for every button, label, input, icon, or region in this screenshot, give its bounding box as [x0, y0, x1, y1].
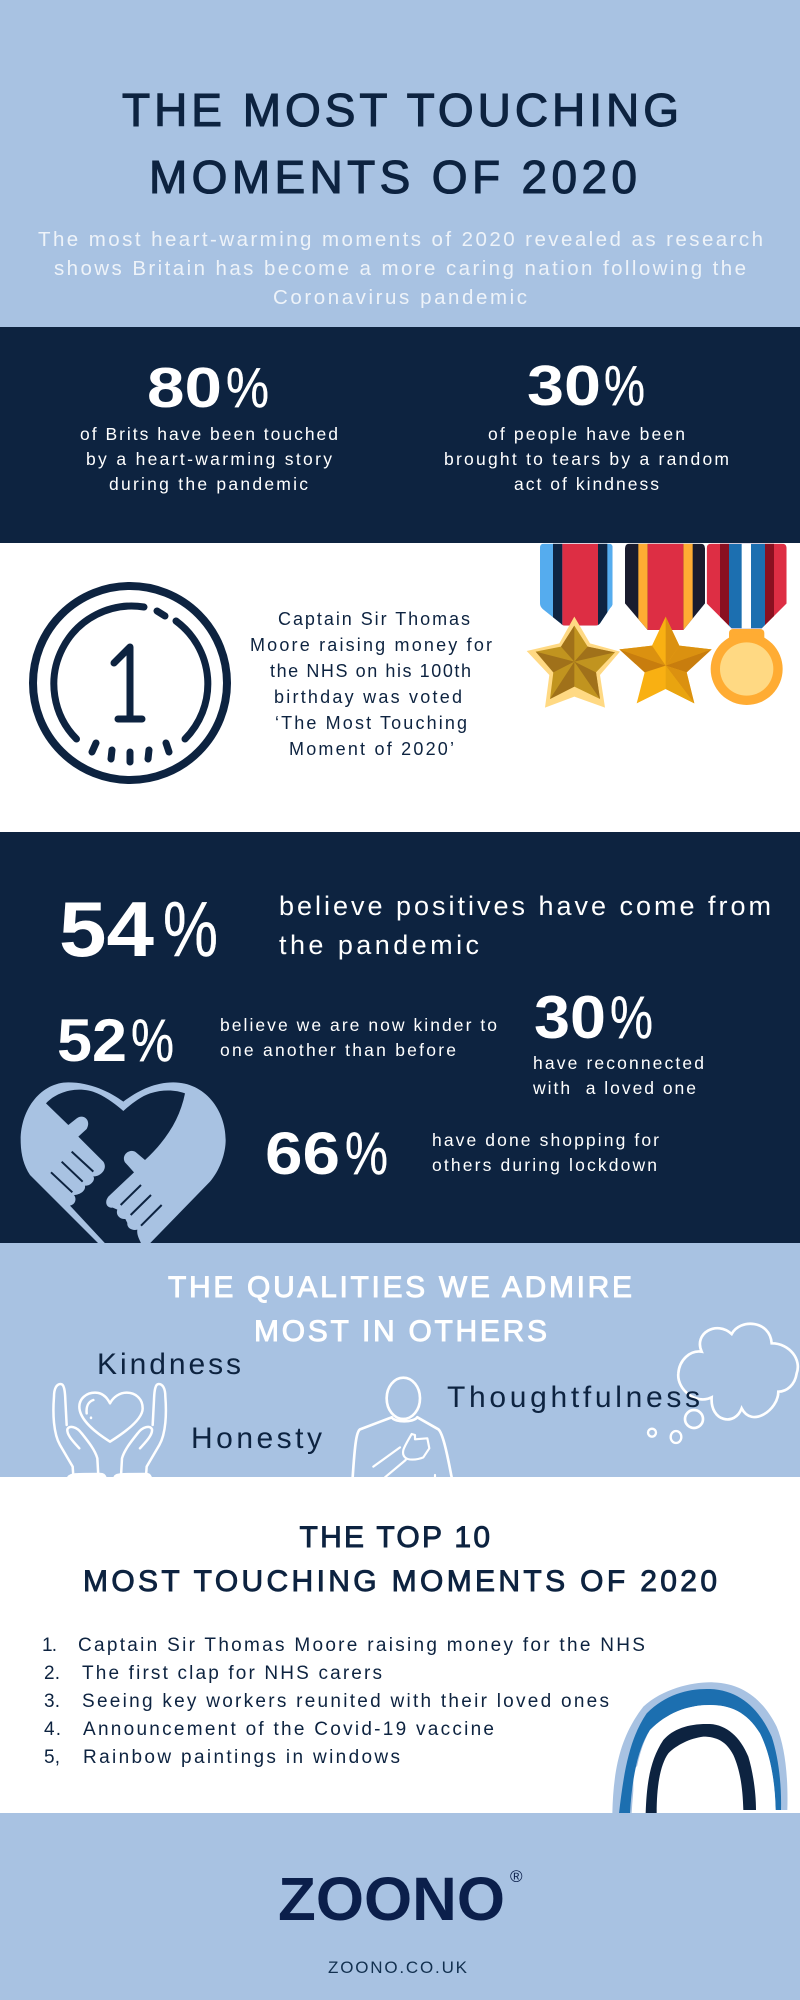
title: MOMENTS OF 2020: [149, 151, 637, 203]
stat: 80%: of Brits have been touched: [80, 424, 338, 444]
stat: 30%: %: [610, 984, 653, 1051]
panel: footer: [0, 1813, 800, 2000]
medal: bronze star: [527, 544, 620, 708]
stat: 80%: by a heart-warming story: [86, 449, 332, 469]
labels: qualities: [97, 1348, 700, 1455]
list: top moments: Announcement of the Covid-19 vaccine: [83, 1719, 494, 1740]
stat: 66%: others during lockdown: [432, 1155, 657, 1175]
text: captain tom: birthday was voted: [274, 687, 462, 707]
stat: 30%: 30: [527, 354, 601, 418]
icon: heart with hands: [21, 1082, 226, 1245]
text: captain tom: Captain Sir Thomas: [278, 609, 470, 629]
stat: 80%: [80, 356, 338, 494]
icon: medals: [527, 544, 787, 708]
text: captain tom: Moore raising money for: [250, 635, 492, 655]
stat: 54%: [59, 885, 771, 973]
icon: hands holding heart: [53, 1384, 166, 1477]
stat: 80%: during the pandemic: [109, 474, 308, 494]
stat: 52%: [57, 1007, 497, 1074]
icon: person hand on heart: [353, 1378, 452, 1477]
stat: 54%: %: [163, 885, 218, 973]
list: top moments: 2.: [44, 1663, 60, 1684]
icon: rainbow: [612, 1682, 788, 1813]
panel: top 10: [0, 1477, 800, 1813]
list: top moments: Rainbow paintings in windows: [83, 1747, 400, 1768]
stat: 52%: 52: [57, 1007, 127, 1074]
icon: number one medal: [33, 586, 227, 780]
labels: qualities: Kindness: [97, 1348, 241, 1381]
logo: ZOONO: ZOONO: [278, 1865, 505, 1933]
text: captain tom: ‘The Most Touching: [275, 713, 467, 733]
heading: qualities: THE QUALITIES WE ADMIRE: [168, 1271, 632, 1304]
stat: 52%: %: [131, 1007, 174, 1074]
stat: 80%: 80: [147, 356, 222, 420]
stat: 30%: %: [604, 354, 645, 418]
labels: qualities: Thoughtfulness: [447, 1381, 700, 1414]
logo: ZOONO: ®: [510, 1867, 523, 1886]
heading: top 10: THE TOP 10: [300, 1521, 490, 1554]
heading: top 10: [83, 1521, 717, 1598]
panel: headline stats: [0, 327, 800, 543]
medal: round: [707, 544, 787, 705]
text: captain tom: the NHS on his 100th: [270, 661, 471, 681]
stat: 30%: [444, 354, 729, 494]
icon: thought cloud: [648, 1324, 798, 1443]
list: top moments: Captain Sir Thomas Moore raising money for the NHS: [78, 1635, 645, 1656]
labels: qualities: Honesty: [191, 1422, 322, 1455]
panel: pandemic stats: [0, 832, 800, 1245]
list: top moments: 3.: [44, 1691, 60, 1712]
list: top moments: Seeing key workers reunited with their loved ones: [82, 1691, 609, 1712]
subtitle: shows Britain has become a more caring nation following the: [54, 257, 746, 280]
title: THE MOST TOUCHING: [122, 84, 679, 136]
subtitle: The most heart-warming moments of 2020 revealed as research: [38, 228, 763, 251]
stat: 54%: the pandemic: [279, 930, 479, 960]
title: [122, 84, 679, 203]
stat: 30%: of people have been: [488, 424, 685, 444]
stat: 30%: 30: [534, 984, 606, 1051]
panel: number one moment: [29, 544, 786, 784]
panel: header: [0, 0, 800, 327]
stat: 30%: with a loved one: [532, 1078, 696, 1098]
text: captain tom: [250, 609, 492, 759]
list: top moments: The first clap for NHS carers: [82, 1663, 382, 1684]
stat: 66%: [265, 1120, 659, 1187]
heading: qualities: MOST IN OTHERS: [254, 1315, 547, 1348]
subtitle: [38, 228, 763, 309]
stat: 30%: act of kindness: [514, 474, 659, 494]
stat: 30%: [532, 984, 704, 1098]
stat: 54%: 54: [59, 885, 154, 973]
heading: qualities: [168, 1271, 632, 1348]
list: top moments: [42, 1635, 645, 1768]
list: top moments: 5,: [44, 1747, 60, 1768]
stat: 66%: 66: [265, 1120, 340, 1187]
list: top moments: 4.: [44, 1719, 61, 1740]
medal: gold star: [619, 544, 712, 703]
stat: 30%: have reconnected: [533, 1053, 704, 1073]
text: captain tom: Moment of 2020’: [289, 739, 454, 759]
stat: 54%: believe positives have come from: [279, 891, 771, 921]
list: top moments: 1.: [42, 1635, 57, 1656]
heading: top 10: MOST TOUCHING MOMENTS OF 2020: [83, 1565, 717, 1598]
stat: 80%: %: [226, 356, 269, 420]
stat: 52%: one another than before: [220, 1040, 456, 1060]
panel: qualities: [0, 1243, 800, 1477]
stat: 66%: have done shopping for: [432, 1130, 659, 1150]
stat: 52%: believe we are now kinder to: [220, 1015, 497, 1035]
stat: 66%: %: [345, 1120, 388, 1187]
stat: 30%: brought to tears by a random: [444, 449, 729, 469]
subtitle: Coronavirus pandemic: [273, 286, 527, 309]
website: ZOONO.CO.UK: [328, 1958, 468, 1977]
